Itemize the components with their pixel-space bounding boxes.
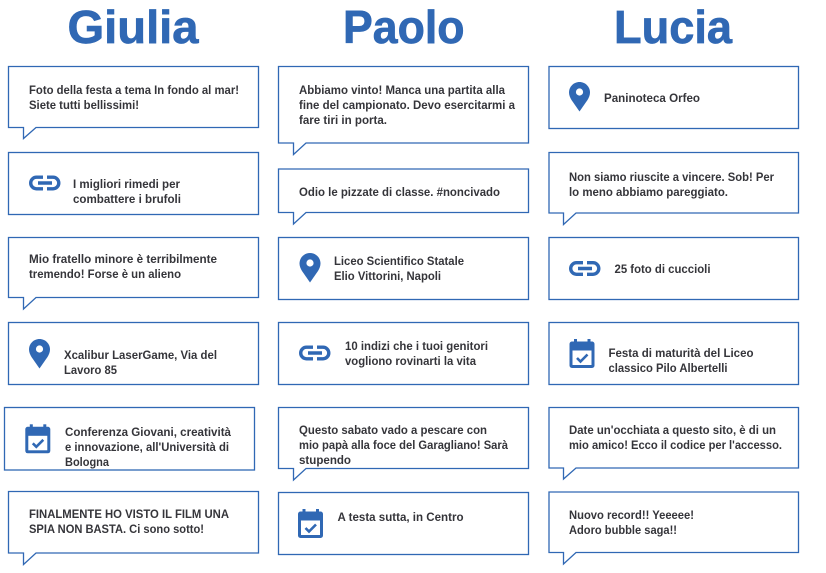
location card: Paninoteca xyxy=(549,66,798,128)
title: Lucia: Lucia xyxy=(614,1,732,53)
speech bubble: fratello minore: tremendo! Forse è un alieno xyxy=(29,269,181,281)
link card: rimedi brufoli: I migliori rimedi per xyxy=(73,179,181,191)
location card: Liceo: Elio Vittorini, Napoli xyxy=(334,271,441,283)
speech bubble: abbiamo vinto: fare tiri in porta. xyxy=(299,115,387,127)
speech bubble: nuovo record xyxy=(549,492,798,564)
title: Paolo: Paolo xyxy=(343,1,464,53)
speech bubble: nuovo record: Adoro bubble saga!! xyxy=(569,525,677,537)
event card: Festa di maturità: classico Pilo Albertelli xyxy=(608,363,728,375)
speech bubble: abbiamo vinto: Abbiamo vinto! Manca una partita alla xyxy=(299,85,506,97)
location card: Xcalibur: Lavoro 85 xyxy=(64,365,118,377)
location card: Paninoteca: Paninoteca Orfeo xyxy=(604,93,700,105)
title: Giulia: Giulia xyxy=(68,1,199,53)
speech bubble: non siamo riuscite: Non siamo riuscite a vincere. Sob! Per xyxy=(569,172,775,184)
speech bubble: film xyxy=(8,492,258,564)
speech bubble: fratello minore xyxy=(8,238,258,309)
speech bubble: film: SPIA NON BASTA. Ci sono sotto! xyxy=(29,524,204,536)
event card: Conferenza Giovani: e innovazione, all'Università di xyxy=(65,442,229,454)
speech bubble: festa a tema: Foto della festa a tema In fondo al mar! xyxy=(29,85,239,97)
link card: rimedi brufoli xyxy=(8,152,258,214)
location card: Xcalibur xyxy=(8,322,258,384)
event card: Conferenza Giovani xyxy=(4,408,254,470)
location card: Liceo: Liceo Scientifico Statale xyxy=(334,256,464,268)
speech bubble: pizzate: Odio le pizzate di classe. #noncivado xyxy=(299,187,500,199)
speech bubble: pizzate xyxy=(278,169,528,224)
speech bubble: pescare: stupendo xyxy=(299,455,351,467)
location card: Xcalibur: Xcalibur LaserGame, Via del xyxy=(64,350,217,362)
speech bubble: abbiamo vinto xyxy=(278,66,528,154)
speech bubble: pescare: Questo sabato vado a pescare con xyxy=(299,425,487,437)
event card: Festa di maturità xyxy=(549,322,798,384)
speech bubble: film: FINALMENTE HO VISTO IL FILM UNA xyxy=(29,509,229,521)
speech bubble: abbiamo vinto: fine del campionato. Devo esercitarmi a xyxy=(299,100,516,112)
speech bubble: date un'occhiata: Date un'occhiata a questo sito, è di un xyxy=(569,425,776,437)
location card: Liceo xyxy=(278,238,528,300)
event card: A testa sutta xyxy=(278,492,528,554)
event card: Festa di maturità: Festa di maturità del Liceo xyxy=(608,348,754,360)
speech bubble: fratello minore: Mio fratello minore è terribilmente xyxy=(29,254,217,266)
speech bubble: festa a tema xyxy=(8,66,258,138)
link card: 25 foto xyxy=(549,238,798,300)
speech bubble: festa a tema: Siete tutti bellissimi! xyxy=(29,100,139,112)
link card: 10 indizi xyxy=(278,322,528,384)
speech bubble: nuovo record: Nuovo record!! Yeeeee! xyxy=(569,510,694,522)
link card: rimedi brufoli: combattere i brufoli xyxy=(73,194,181,206)
speech bubble: pescare: mio papà alla foce del Garagliano! Sarà xyxy=(299,440,509,452)
link card: 10 indizi: 10 indizi che i tuoi genitori xyxy=(345,341,488,353)
link card: 25 foto: 25 foto di cuccioli xyxy=(614,264,710,276)
link card: 10 indizi: vogliono rovinarti la vita xyxy=(345,356,477,368)
event card: Conferenza Giovani: Conferenza Giovani, creatività xyxy=(65,427,232,439)
event card: A testa sutta: A testa sutta, in Centro xyxy=(338,512,464,524)
speech bubble: non siamo riuscite: lo meno abbiamo pareggiato. xyxy=(569,187,728,199)
column: Paolo xyxy=(278,66,528,554)
speech bubble: date un'occhiata xyxy=(549,408,798,479)
column: Lucia xyxy=(549,66,798,564)
column: Giulia xyxy=(4,66,258,564)
speech bubble: date un'occhiata: mio amico! Ecco il codice per l'accesso. xyxy=(569,440,782,452)
event card: Conferenza Giovani: Bologna xyxy=(65,457,110,469)
speech bubble: non siamo riuscite xyxy=(549,152,798,224)
speech bubble: pescare xyxy=(278,408,528,480)
